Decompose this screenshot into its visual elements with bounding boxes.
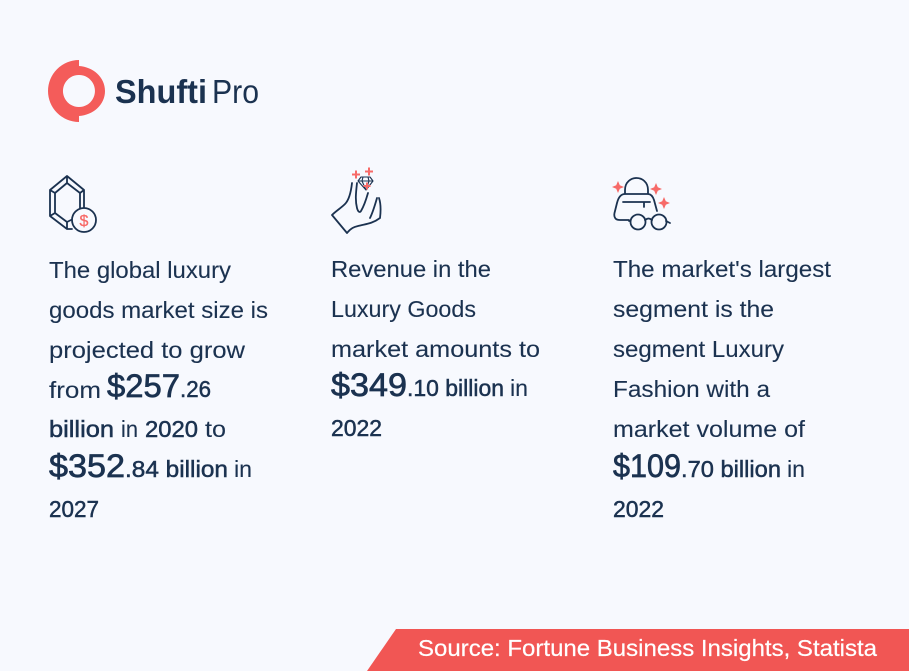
icon: gem with dollar coin: $ — [80, 213, 89, 230]
text: market size projection: in — [121, 416, 138, 442]
text: largest segment: Fashion with a — [613, 376, 770, 402]
text: market size projection: to — [205, 416, 226, 442]
text: market size projection: 2027 — [49, 496, 99, 522]
column 2 — [331, 168, 540, 441]
text: market size projection: The global luxury — [49, 257, 232, 283]
text: market size projection: projected to grow — [49, 337, 245, 363]
logo wordmark — [115, 73, 259, 110]
column 1 — [49, 176, 268, 522]
text: revenue: market amounts to — [331, 336, 540, 362]
source text: Source: Fortune Business Insights, Statista — [418, 635, 877, 661]
text: revenue: $349 — [331, 367, 407, 403]
icon: hand holding diamond — [332, 168, 381, 233]
text: revenue: in — [510, 375, 528, 401]
text: market size projection: from — [49, 377, 101, 403]
text: largest segment — [613, 256, 832, 522]
text: market size projection — [49, 257, 268, 522]
icon: gem with dollar coin — [50, 176, 96, 232]
text: revenue: .10 billion — [407, 375, 504, 401]
text: largest segment: segment is the — [613, 296, 774, 322]
text: largest segment: 2022 — [613, 496, 664, 522]
logo: Shufti Pro — [48, 60, 259, 122]
column 3 — [612, 178, 832, 522]
banner background — [367, 629, 909, 671]
logo wordmark: Pro — [212, 73, 259, 110]
text: market size projection: goods market size is — [49, 297, 268, 323]
logo wordmark: Shufti — [115, 73, 207, 110]
text: market size projection: .26 — [180, 376, 211, 402]
text: largest segment: .70 billion — [681, 456, 781, 482]
source banner — [367, 629, 909, 671]
text: largest segment: The market's largest — [613, 256, 832, 282]
text: market size projection: $352 — [49, 448, 125, 484]
logo ring — [48, 60, 105, 122]
icon: handbag and glasses — [612, 178, 670, 230]
text: revenue: Luxury Goods — [331, 296, 476, 322]
text: largest segment: market volume of — [613, 416, 806, 442]
text: largest segment: segment Luxury — [613, 336, 785, 362]
text: market size projection: $257 — [107, 368, 180, 404]
text: market size projection: in — [234, 456, 252, 482]
text: revenue: 2022 — [331, 415, 382, 441]
text: market size projection: billion — [49, 416, 114, 442]
text: largest segment: $109 — [613, 448, 681, 484]
text: revenue: Revenue in the — [331, 256, 491, 282]
text: market size projection: .84 billion — [125, 456, 228, 482]
text: market size projection: 2020 — [145, 416, 198, 442]
text: largest segment: in — [787, 456, 805, 482]
text: revenue — [331, 256, 540, 441]
